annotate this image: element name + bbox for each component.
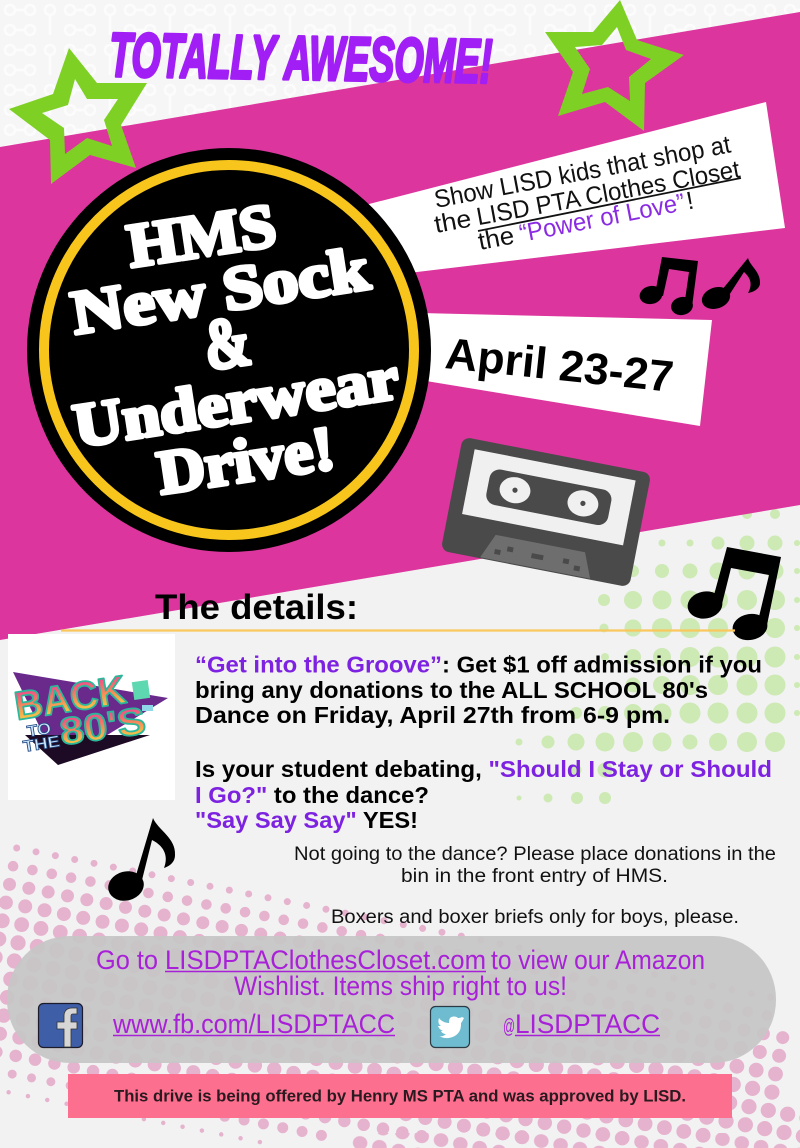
icon: cassette tape xyxy=(441,437,651,587)
yellow ring xyxy=(44,165,414,535)
badge title: Underwear xyxy=(69,344,403,461)
banner text line 3: ! xyxy=(684,187,696,215)
link text: LISDPTAClothesCloset.com xyxy=(165,945,486,975)
badge title: HMS xyxy=(123,192,280,281)
badge title xyxy=(67,192,403,508)
link text: LISDPTACC xyxy=(515,1009,660,1039)
star right xyxy=(545,0,684,131)
link text: Go to xyxy=(96,945,158,975)
badge title: Drive! xyxy=(153,414,339,508)
text: dance note: bin in the front entry of HMS. xyxy=(401,866,668,887)
top patterned background xyxy=(0,0,800,150)
text: details body: “Get into the Groove”: Get $1 off admission if you xyxy=(195,652,762,678)
icon: small single music note xyxy=(699,258,760,312)
footer text: This drive is being offered by Henry MS PTA and was approved by LISD. xyxy=(114,1088,686,1106)
badge title: New Sock xyxy=(67,235,374,348)
text: dance note xyxy=(294,844,776,928)
text: details body: Dance on Friday, April 27th from 6-9 pm. xyxy=(195,702,670,728)
icon: small double music note xyxy=(638,257,698,317)
banner text line 2: the xyxy=(432,205,473,239)
top link pattern xyxy=(0,0,800,150)
date text: April 23-27 xyxy=(443,329,676,402)
badge title: & xyxy=(199,300,256,386)
link text: to view our Amazon xyxy=(491,945,705,975)
link text: @ xyxy=(503,1016,515,1038)
badge circle xyxy=(27,148,431,552)
text: details body: bring any donations to the ALL SCHOOL 80's xyxy=(195,677,708,703)
text: details body: I Go?" to the dance? xyxy=(195,782,429,808)
banner text line 2: LISD PTA Clothes Closet xyxy=(474,155,742,231)
pink halftone dots xyxy=(0,848,800,1146)
logo: back to the 80's: BACK xyxy=(12,668,129,729)
green halftone dots xyxy=(516,509,800,804)
title: TOTALLY AWESOME! xyxy=(109,21,493,97)
banner: date xyxy=(420,313,712,426)
text: dance note: Boxers and boxer briefs only for boys, please. xyxy=(331,907,739,928)
icon: twitter xyxy=(430,1006,470,1048)
banner: message xyxy=(345,102,785,282)
banner text line 1: Show LISD kids that shop at xyxy=(432,130,733,214)
banner underline xyxy=(478,178,741,231)
pink halftone dots at bottom edge xyxy=(350,1133,800,1148)
text: details body: Is your student debating, "Should I Stay or Should xyxy=(195,756,772,782)
logo: back to the 80's xyxy=(8,634,175,800)
logo: back to the 80's: THE xyxy=(22,733,62,756)
banner text line 3: “Power of Love” xyxy=(517,188,687,248)
text: details body xyxy=(195,652,772,833)
text: details body: "Say Say Say" YES! xyxy=(195,807,418,833)
star left xyxy=(9,48,147,184)
icon: facebook xyxy=(38,1004,82,1048)
icon: large double music note xyxy=(685,547,781,643)
text: dance note: Not going to the dance? Please place donations in the xyxy=(294,844,776,865)
panel: links pill xyxy=(7,936,776,1063)
link text: www.fb.com/LISDPTACC xyxy=(112,1009,395,1039)
link text: Wishlist. Items ship right to us! xyxy=(234,971,567,1001)
banner text line 3: the xyxy=(476,222,516,256)
logo: back to the 80's: TO xyxy=(26,720,52,741)
logo: back to the 80's: 80'S xyxy=(57,700,148,754)
link text xyxy=(96,945,705,1039)
pink diagonal band xyxy=(0,12,800,640)
heading: the details: The details: xyxy=(155,588,358,627)
icon: eighth music note xyxy=(105,818,175,905)
footer bar xyxy=(68,1074,732,1118)
